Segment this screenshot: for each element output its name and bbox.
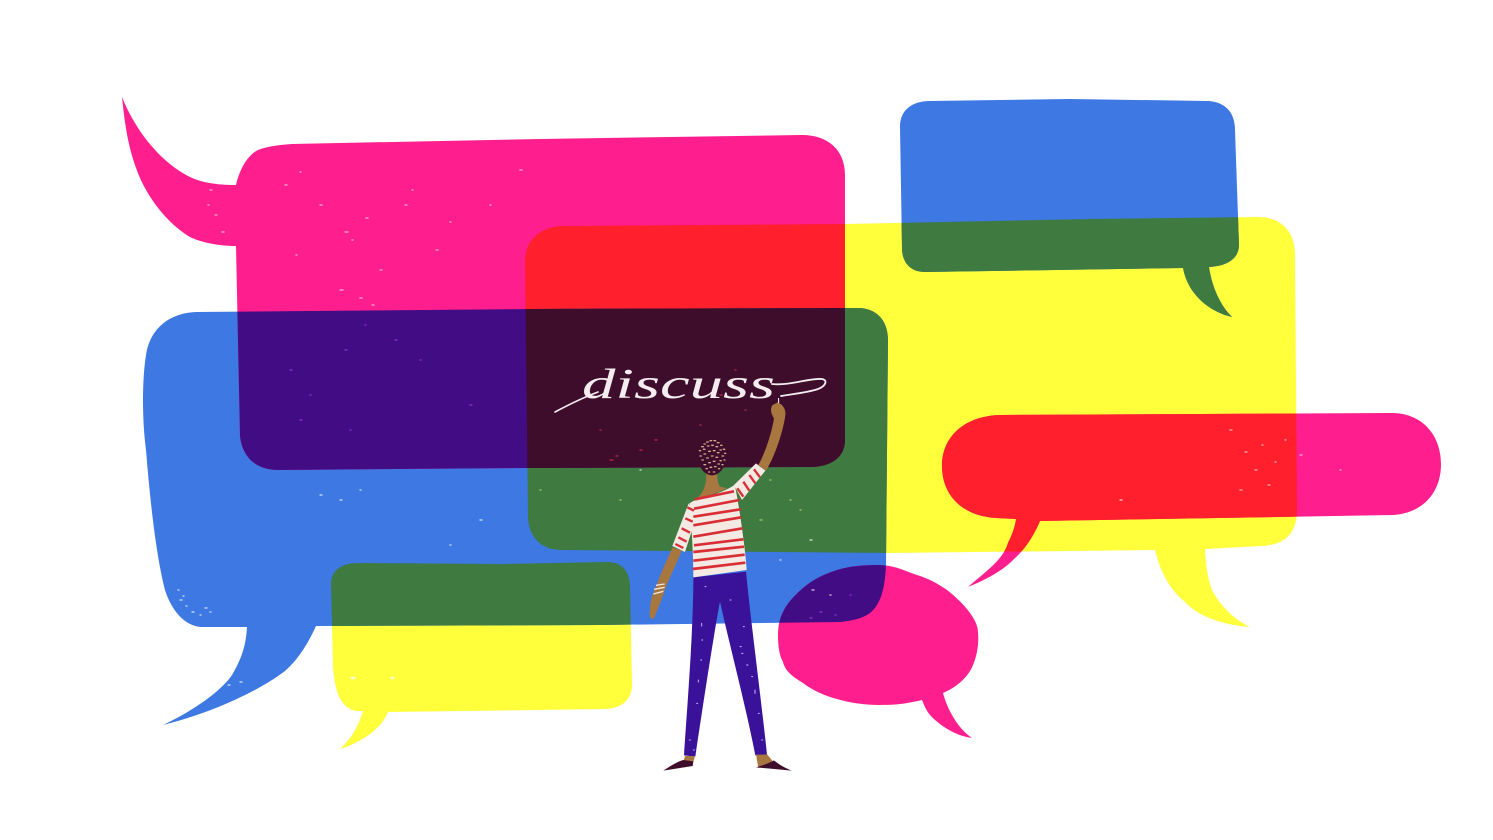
person writing with chalk: [650, 398, 792, 771]
speech bubble: small yellow: [331, 562, 632, 749]
illustration: overlapping speech bubbles with a person writing discuss: [122, 97, 1441, 771]
right shoe: [756, 760, 792, 771]
neck: [698, 472, 727, 497]
pants speckles: [689, 587, 763, 750]
speech bubble: small blue: [900, 99, 1239, 317]
speech bubble: round pink: [778, 565, 978, 738]
overlap: pink over yellow turns red: [525, 224, 1297, 552]
flourish: trailing loop to chalk: [772, 379, 825, 396]
handwritten word: discuss: [555, 362, 825, 412]
head with curly hair: [698, 438, 726, 475]
speech bubble: large yellow: [525, 217, 1297, 627]
word text: discuss: [582, 362, 775, 408]
speech bubble: pink pill: [942, 413, 1441, 587]
overlap: pink over blue turns purple: [237, 308, 886, 623]
feet: [683, 755, 774, 768]
left arm and hand: [650, 547, 682, 619]
pants: [684, 572, 767, 757]
striped shirt: [672, 463, 765, 577]
left shoe: [663, 760, 693, 771]
speech bubble: large blue: [143, 308, 888, 725]
chalk: [778, 398, 779, 407]
flourish: entry stroke: [555, 392, 598, 412]
right arm raised: [758, 403, 785, 471]
speech bubble: large pink with upper tail: [122, 97, 845, 470]
overlap: blue over yellow turns green: [331, 217, 1239, 626]
bracelets: [653, 584, 665, 594]
overlap: all three colours form the dark panel: [526, 308, 845, 468]
paint speckle texture: [178, 170, 1341, 685]
